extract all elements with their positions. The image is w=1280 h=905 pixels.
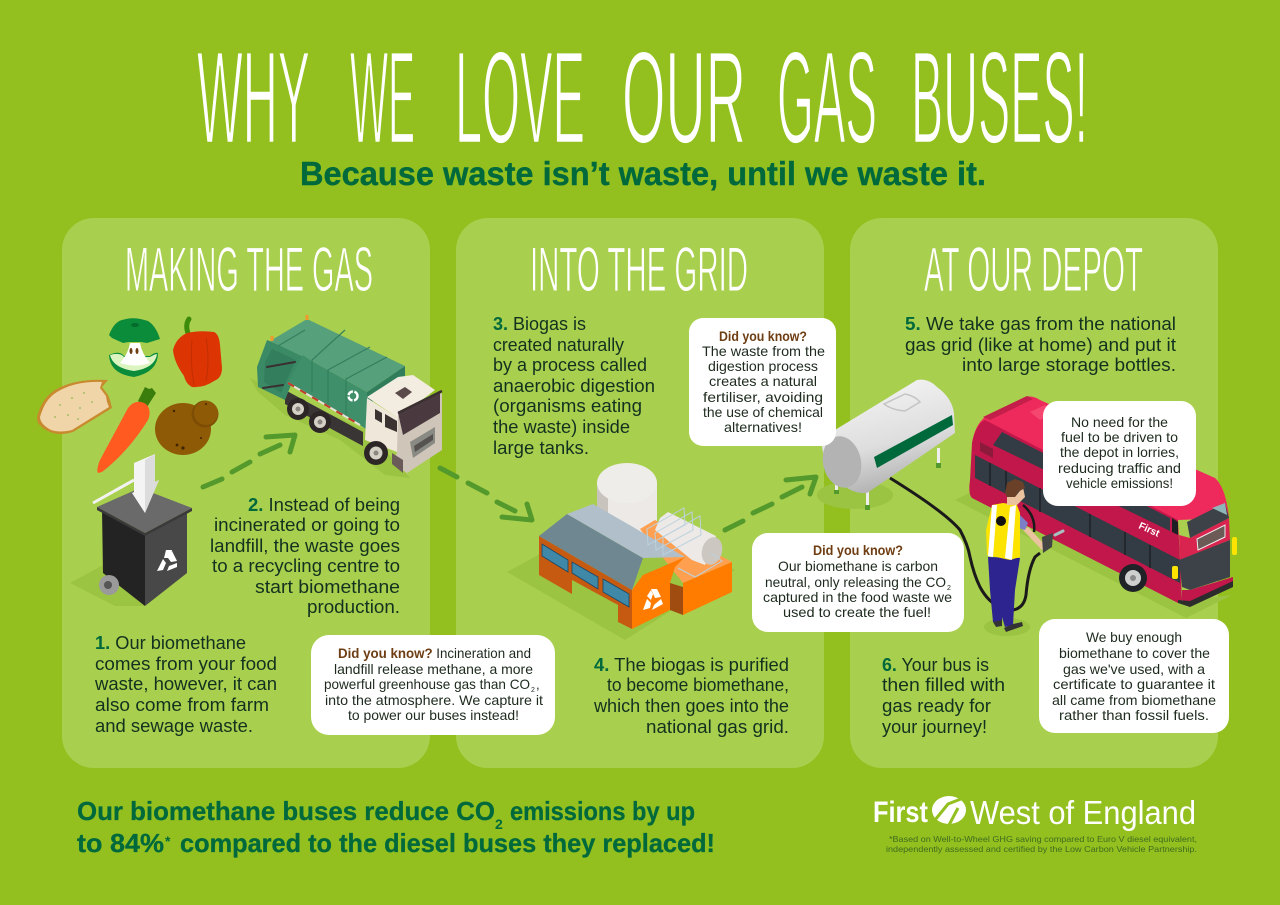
callout: fertiliser xyxy=(689,318,836,446)
icon: bin lorry xyxy=(250,315,442,478)
icon: carrot xyxy=(97,387,156,473)
text: step 5 xyxy=(905,314,1176,375)
callout: no lorries: vehicle emissions! xyxy=(1066,475,1173,491)
callout: carbon neutral xyxy=(752,533,964,632)
text: step 3 xyxy=(493,314,655,458)
panel: into the grid xyxy=(440,218,824,768)
callout: fertiliser: the use of chemical xyxy=(703,404,823,420)
text: step 1: also come from farm xyxy=(95,695,269,715)
text: step 2: 2. Instead of being xyxy=(248,495,400,515)
callout: carbon neutral: Did you know? xyxy=(813,542,903,558)
icon: bread slice xyxy=(37,380,112,434)
text: step 1 xyxy=(94,633,277,736)
text: step 5: into large storage bottles. xyxy=(962,355,1176,375)
text: step 3: (organisms eating xyxy=(493,396,642,416)
text: step 2: to a recycling centre to xyxy=(212,556,400,576)
callout: carbon neutral: used to create the fuel! xyxy=(783,604,931,620)
callout: incineration: into the atmosphere. We capture it xyxy=(325,692,543,708)
text: step 1: and sewage waste. xyxy=(95,716,253,736)
text: step 4: to become biomethane, xyxy=(607,675,789,695)
text: step 2: incinerated or going to xyxy=(214,515,400,535)
bottom statement: Our biomethane buses reduce CO xyxy=(77,796,495,826)
callout: carbon neutral: neutral, only releasing the CO xyxy=(765,574,946,590)
bottom statement: to 84% xyxy=(77,828,164,858)
text: step 6: gas ready for xyxy=(882,696,991,716)
icon: potato xyxy=(155,400,218,455)
bottom statement: emissions by up xyxy=(510,796,695,826)
icon: worker refuelling xyxy=(984,479,1063,636)
logo: First West of England xyxy=(873,794,1196,831)
text: step 3: the waste) inside xyxy=(493,417,630,437)
callout: certificate xyxy=(1039,619,1229,733)
bottom statement: 2 xyxy=(495,816,503,832)
footnote: *Based on Well-to-Wheel GHG saving compared to Euro V diesel equivalent, xyxy=(889,834,1197,844)
text: step 2: start biomethane xyxy=(255,577,400,597)
text: step 2: production. xyxy=(307,597,400,617)
text: step 3: 3. Biogas is xyxy=(493,314,586,334)
text: step 5: 5. We take gas from the national xyxy=(905,314,1176,334)
icon: recycling symbol on bin xyxy=(157,550,177,571)
callout: carbon neutral: Our biomethane is carbon xyxy=(778,558,938,574)
icon: red pepper xyxy=(173,319,222,387)
callout: fertiliser: alternatives! xyxy=(724,419,802,435)
icon: double decker bus xyxy=(955,396,1237,618)
icon: recycling symbol on plant xyxy=(643,589,663,610)
callout: incineration: powerful greenhouse gas than CO xyxy=(324,676,530,692)
callout: carbon neutral: captured in the food waste we xyxy=(763,589,952,605)
text: step 4: which then goes into the xyxy=(593,696,789,716)
subtitle: Because waste isn’t waste, until we waste it. xyxy=(300,155,986,192)
panel: at our depot xyxy=(817,218,1237,768)
icon: apple core xyxy=(109,318,160,377)
panel: making the gas: MAKING THE GAS xyxy=(125,235,373,305)
text: step 4: 4. The biogas is purified xyxy=(594,655,789,675)
text: step 1: waste, however, it can xyxy=(94,674,277,694)
callout: incineration: landfill release methane, a more xyxy=(334,661,533,677)
callout: fertiliser: creates a natural xyxy=(709,373,817,389)
bottom statement xyxy=(77,796,715,858)
callout: certificate: biomethane to cover the xyxy=(1059,645,1210,661)
callout: incineration xyxy=(311,635,555,735)
label: First on bus: First xyxy=(1137,521,1162,540)
text: step 2 xyxy=(210,495,400,617)
icon: biogas plant xyxy=(507,463,735,640)
text: step 4: national gas grid. xyxy=(646,717,789,737)
callout: fertiliser: The waste from the xyxy=(702,343,825,359)
title: OUR xyxy=(622,24,746,171)
callout: incineration: to power our buses instead! xyxy=(348,707,519,723)
text: step 3: anaerobic digestion xyxy=(493,376,655,396)
text: step 1: 1. Our biomethane xyxy=(95,633,246,653)
callout: incineration: 2 xyxy=(531,687,535,694)
text: step 6: your journey! xyxy=(882,717,987,737)
callout: incineration: Did you know? Incineration and xyxy=(338,645,531,661)
footnote xyxy=(886,834,1197,854)
text: step 5: gas grid (like at home) and put it xyxy=(905,335,1176,355)
icon: First swoosh xyxy=(932,796,966,825)
text: step 6 xyxy=(882,655,1005,737)
title: WHY xyxy=(197,24,310,171)
arrow: bin to truck xyxy=(203,435,295,487)
panel: into the grid: INTO THE GRID xyxy=(530,235,748,305)
callout: carbon neutral: 2 xyxy=(947,585,951,592)
icon: wheelie bin with arrow xyxy=(70,454,192,606)
text: step 3: created naturally xyxy=(493,335,624,355)
title: GAS xyxy=(777,24,877,171)
callout: certificate: We buy enough xyxy=(1086,629,1182,645)
footnote: independently assessed and certified by the Low Carbon Vehicle Partnership. xyxy=(886,844,1197,854)
logo: First West of England: First xyxy=(873,796,928,829)
panel: making the gas xyxy=(37,218,442,768)
callout: certificate: all came from biomethane xyxy=(1052,692,1216,708)
title: WE xyxy=(350,24,415,171)
callout: certificate: gas we've used, with a xyxy=(1063,661,1205,677)
callout: no lorries: reducing traffic and xyxy=(1058,460,1181,476)
callout: no lorries: No need for the xyxy=(1071,414,1168,430)
callout: certificate: certificate to guarantee it xyxy=(1053,676,1215,692)
callout: certificate: rather than fossil fuels. xyxy=(1059,707,1209,723)
title xyxy=(197,24,1088,171)
hose xyxy=(890,478,1040,610)
callout: no lorries: the depot in lorries, xyxy=(1060,444,1179,460)
bottom statement: * xyxy=(165,833,171,849)
text: step 1: comes from your food xyxy=(95,654,277,674)
callout: fertiliser: Did you know? xyxy=(719,328,807,344)
callout: fertiliser: fertiliser, avoiding xyxy=(703,389,823,405)
text: step 6: 6. Your bus is xyxy=(882,655,989,675)
text: step 3: large tanks. xyxy=(493,438,589,458)
text: step 4 xyxy=(593,655,789,737)
text: step 2: landfill, the waste goes xyxy=(210,536,400,556)
arrow: truck to factory xyxy=(440,468,532,520)
callout: incineration: , xyxy=(536,677,540,692)
callout: fertiliser: digestion process xyxy=(708,358,818,374)
icon: gas storage tank xyxy=(817,380,955,510)
title: LOVE xyxy=(455,24,585,171)
bottom statement: compared to the diesel buses they replaced! xyxy=(180,828,715,858)
logo: First West of England: West of England xyxy=(970,794,1196,831)
callout: no lorries: fuel to be driven to xyxy=(1061,429,1178,445)
text: step 6: then filled with xyxy=(882,675,1005,695)
text: step 3: by a process called xyxy=(493,355,647,375)
callout: no lorries xyxy=(1043,401,1196,506)
arrow: factory to storage xyxy=(725,477,816,530)
